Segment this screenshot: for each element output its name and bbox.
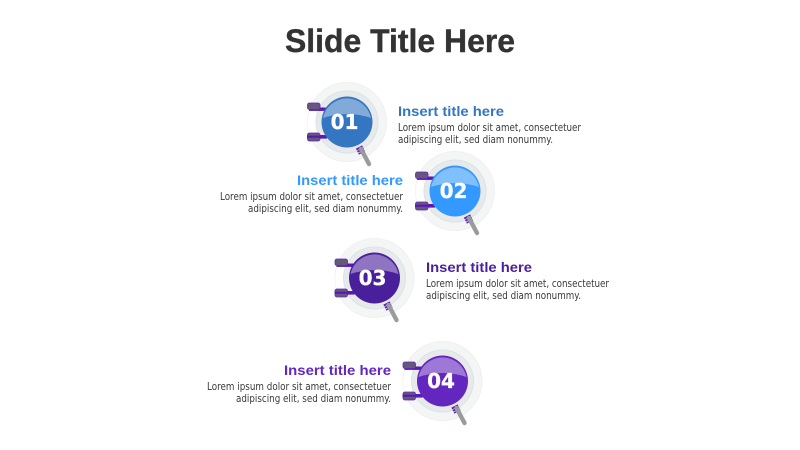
step 02 text: Insert title here xyxy=(297,172,403,188)
step 04 text: Lorem ipsum dolor sit amet, consectetuer xyxy=(207,381,392,393)
title: Slide Title Here xyxy=(285,23,515,59)
step 03 text xyxy=(426,259,610,302)
step 01 text: Lorem ipsum dolor sit amet, consectetuer xyxy=(398,122,582,134)
step 04 text: Insert title here xyxy=(284,362,391,378)
step 03 icon xyxy=(334,238,414,320)
step 01 text: adipiscing elit, sed diam nonummy. xyxy=(398,134,553,146)
step 03 icon: 03 xyxy=(359,266,386,290)
step 04 icon: 04 xyxy=(427,369,455,393)
step 03 text: adipiscing elit, sed diam nonummy. xyxy=(426,290,581,302)
step 02 icon xyxy=(415,151,495,233)
step 02 text xyxy=(220,172,404,215)
step 01 text: Insert title here xyxy=(398,103,504,119)
step 04 text xyxy=(207,362,392,405)
step 01 icon: 01 xyxy=(331,110,358,134)
step 02 icon: 02 xyxy=(440,179,467,203)
step 01 icon xyxy=(307,82,387,164)
step 02 text: Lorem ipsum dolor sit amet, consectetuer xyxy=(220,191,404,203)
step 02 text: adipiscing elit, sed diam nonummy. xyxy=(248,203,403,215)
step 01 text xyxy=(398,103,582,146)
step 04 icon xyxy=(402,341,482,423)
step 03 text: Insert title here xyxy=(426,259,532,275)
step 03 text: Lorem ipsum dolor sit amet, consectetuer xyxy=(426,278,610,290)
step 04 text: adipiscing elit, sed diam nonummy. xyxy=(236,393,391,405)
